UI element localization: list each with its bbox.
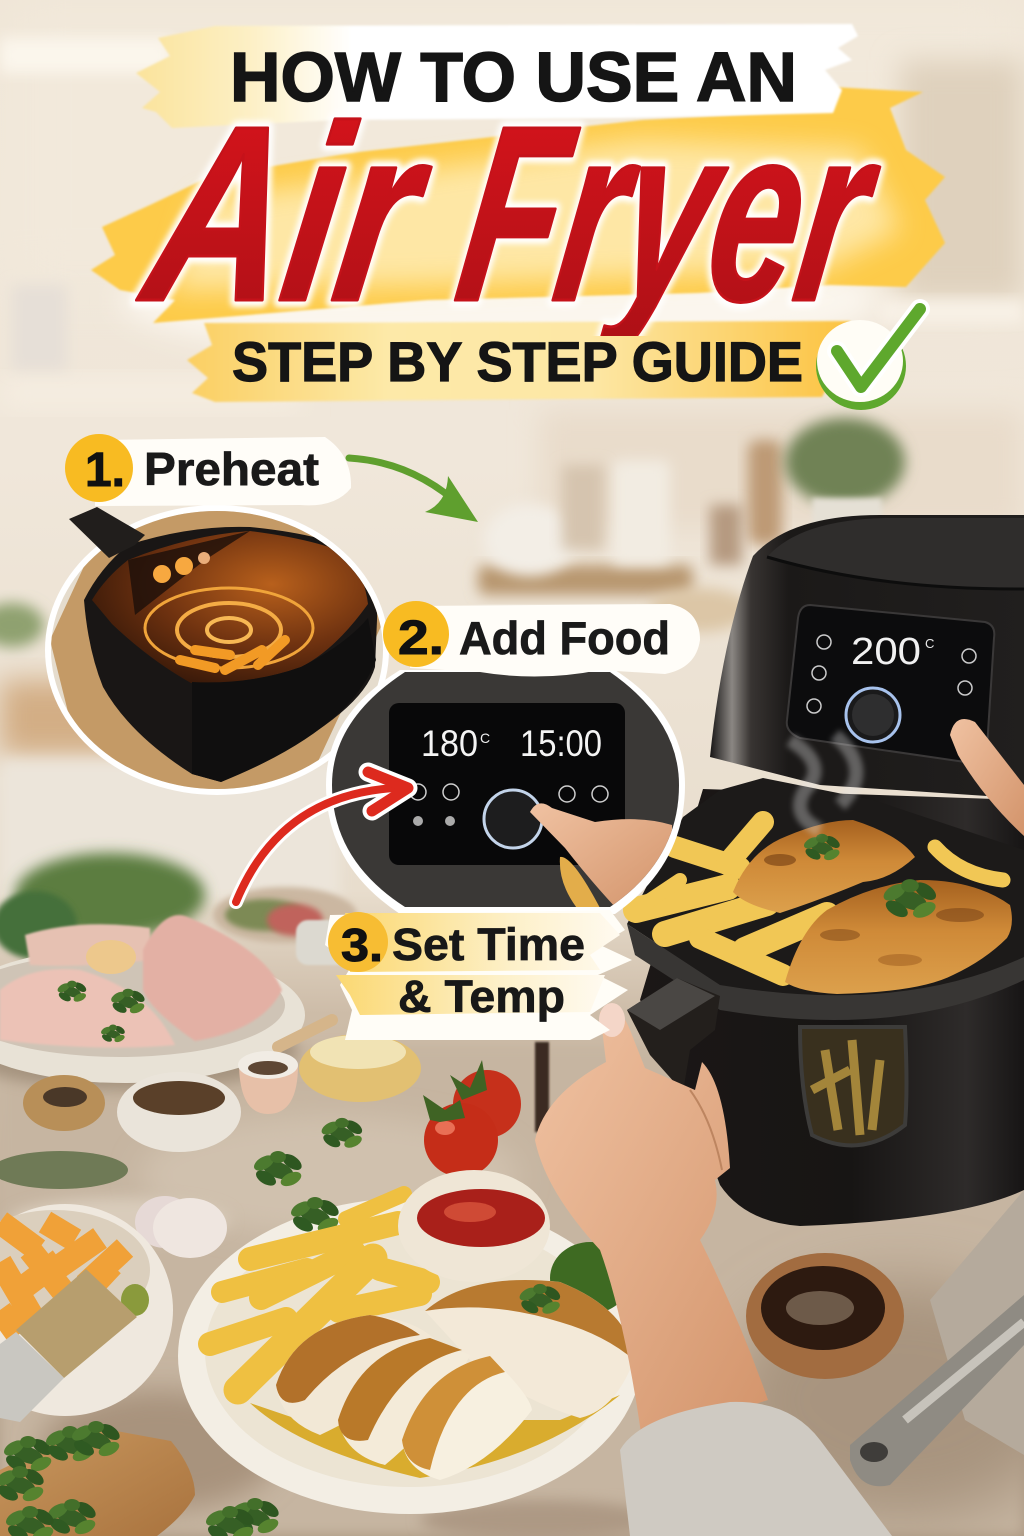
parsley bbox=[288, 1197, 630, 1314]
step 2 image: digital control panel: 180 bbox=[421, 723, 478, 764]
step 3 label: Set Time bbox=[392, 919, 585, 970]
steam bbox=[790, 735, 856, 830]
plated fries bbox=[210, 1194, 428, 1390]
knit sweater sleeve bbox=[620, 1402, 892, 1536]
small sesame sauce bowl bbox=[746, 1253, 904, 1379]
small spice bowls and oil dish bbox=[23, 1020, 421, 1152]
fryer body and neck bbox=[640, 789, 1024, 1226]
olive oil sauce bbox=[250, 1395, 620, 1478]
sliced chicken bbox=[276, 1280, 634, 1480]
fries in the basket bbox=[636, 822, 1003, 975]
arm holding the fryer handle bbox=[535, 1003, 768, 1440]
fryer handle bbox=[627, 978, 720, 1092]
icon: green check badge bbox=[816, 309, 920, 410]
step 3 label: 3. bbox=[341, 919, 383, 971]
fryer control panel: C bbox=[925, 636, 934, 651]
subtitle text: STEP BY STEP GUIDE bbox=[232, 330, 803, 393]
step 2 image: digital control panel: C bbox=[480, 730, 490, 746]
background herbs and salad plate bbox=[0, 853, 357, 965]
step 2 label bbox=[383, 601, 700, 677]
yellow brush stroke bbox=[91, 87, 945, 323]
step 1 label bbox=[65, 434, 351, 506]
white brush stroke bbox=[136, 24, 858, 128]
title: air fryer: Air bbox=[127, 74, 447, 354]
step 1 image: preheating basket bbox=[40, 500, 390, 800]
fryer control panel bbox=[787, 605, 994, 762]
step 3 label: & Temp bbox=[398, 971, 565, 1022]
cutting board and parsley bbox=[0, 1421, 195, 1536]
white plate bbox=[178, 1198, 642, 1514]
step 2 label: Add Food bbox=[459, 612, 670, 664]
subtitle banner bbox=[187, 321, 858, 402]
title: air fryer bbox=[130, 116, 889, 336]
bay leaf, garlic, table herbs bbox=[0, 1118, 364, 1536]
basket rim bbox=[627, 778, 1024, 1020]
left bowl with vegetable fries and basting brush bbox=[0, 1204, 173, 1422]
step 1 label: 1. bbox=[85, 444, 125, 497]
step 3 label bbox=[325, 910, 632, 1040]
bottle behind the hand bbox=[535, 1042, 549, 1132]
hand on control panel bbox=[950, 719, 1024, 836]
title banner bbox=[91, 24, 945, 410]
grilled chicken in the basket bbox=[733, 820, 1012, 994]
air fryer appliance bbox=[627, 515, 1024, 1226]
arrow: red pointer arrow bbox=[236, 772, 408, 902]
fryer hood bbox=[710, 515, 1024, 802]
title: air fryer: Air bbox=[127, 74, 447, 354]
title: how to use an: HOW TO USE AN bbox=[230, 38, 797, 116]
step 2 label: 2. bbox=[398, 612, 444, 665]
arrow: green preheat arrow bbox=[349, 458, 478, 522]
towel and tongs bbox=[850, 1190, 1024, 1486]
raw chicken plate bbox=[0, 915, 305, 1090]
step 2 image: digital control panel: 15:00 bbox=[520, 723, 602, 764]
basket handle bbox=[69, 507, 145, 558]
step 1 label: Preheat bbox=[144, 443, 319, 495]
food plate with chicken and fries bbox=[178, 1170, 642, 1514]
tomatoes bbox=[423, 1060, 521, 1177]
ketchup bowl bbox=[398, 1170, 550, 1282]
fryer control panel: 200 bbox=[851, 631, 921, 673]
step 2 image: digital control panel bbox=[325, 670, 690, 920]
soft white glow behind title bbox=[120, 240, 880, 360]
